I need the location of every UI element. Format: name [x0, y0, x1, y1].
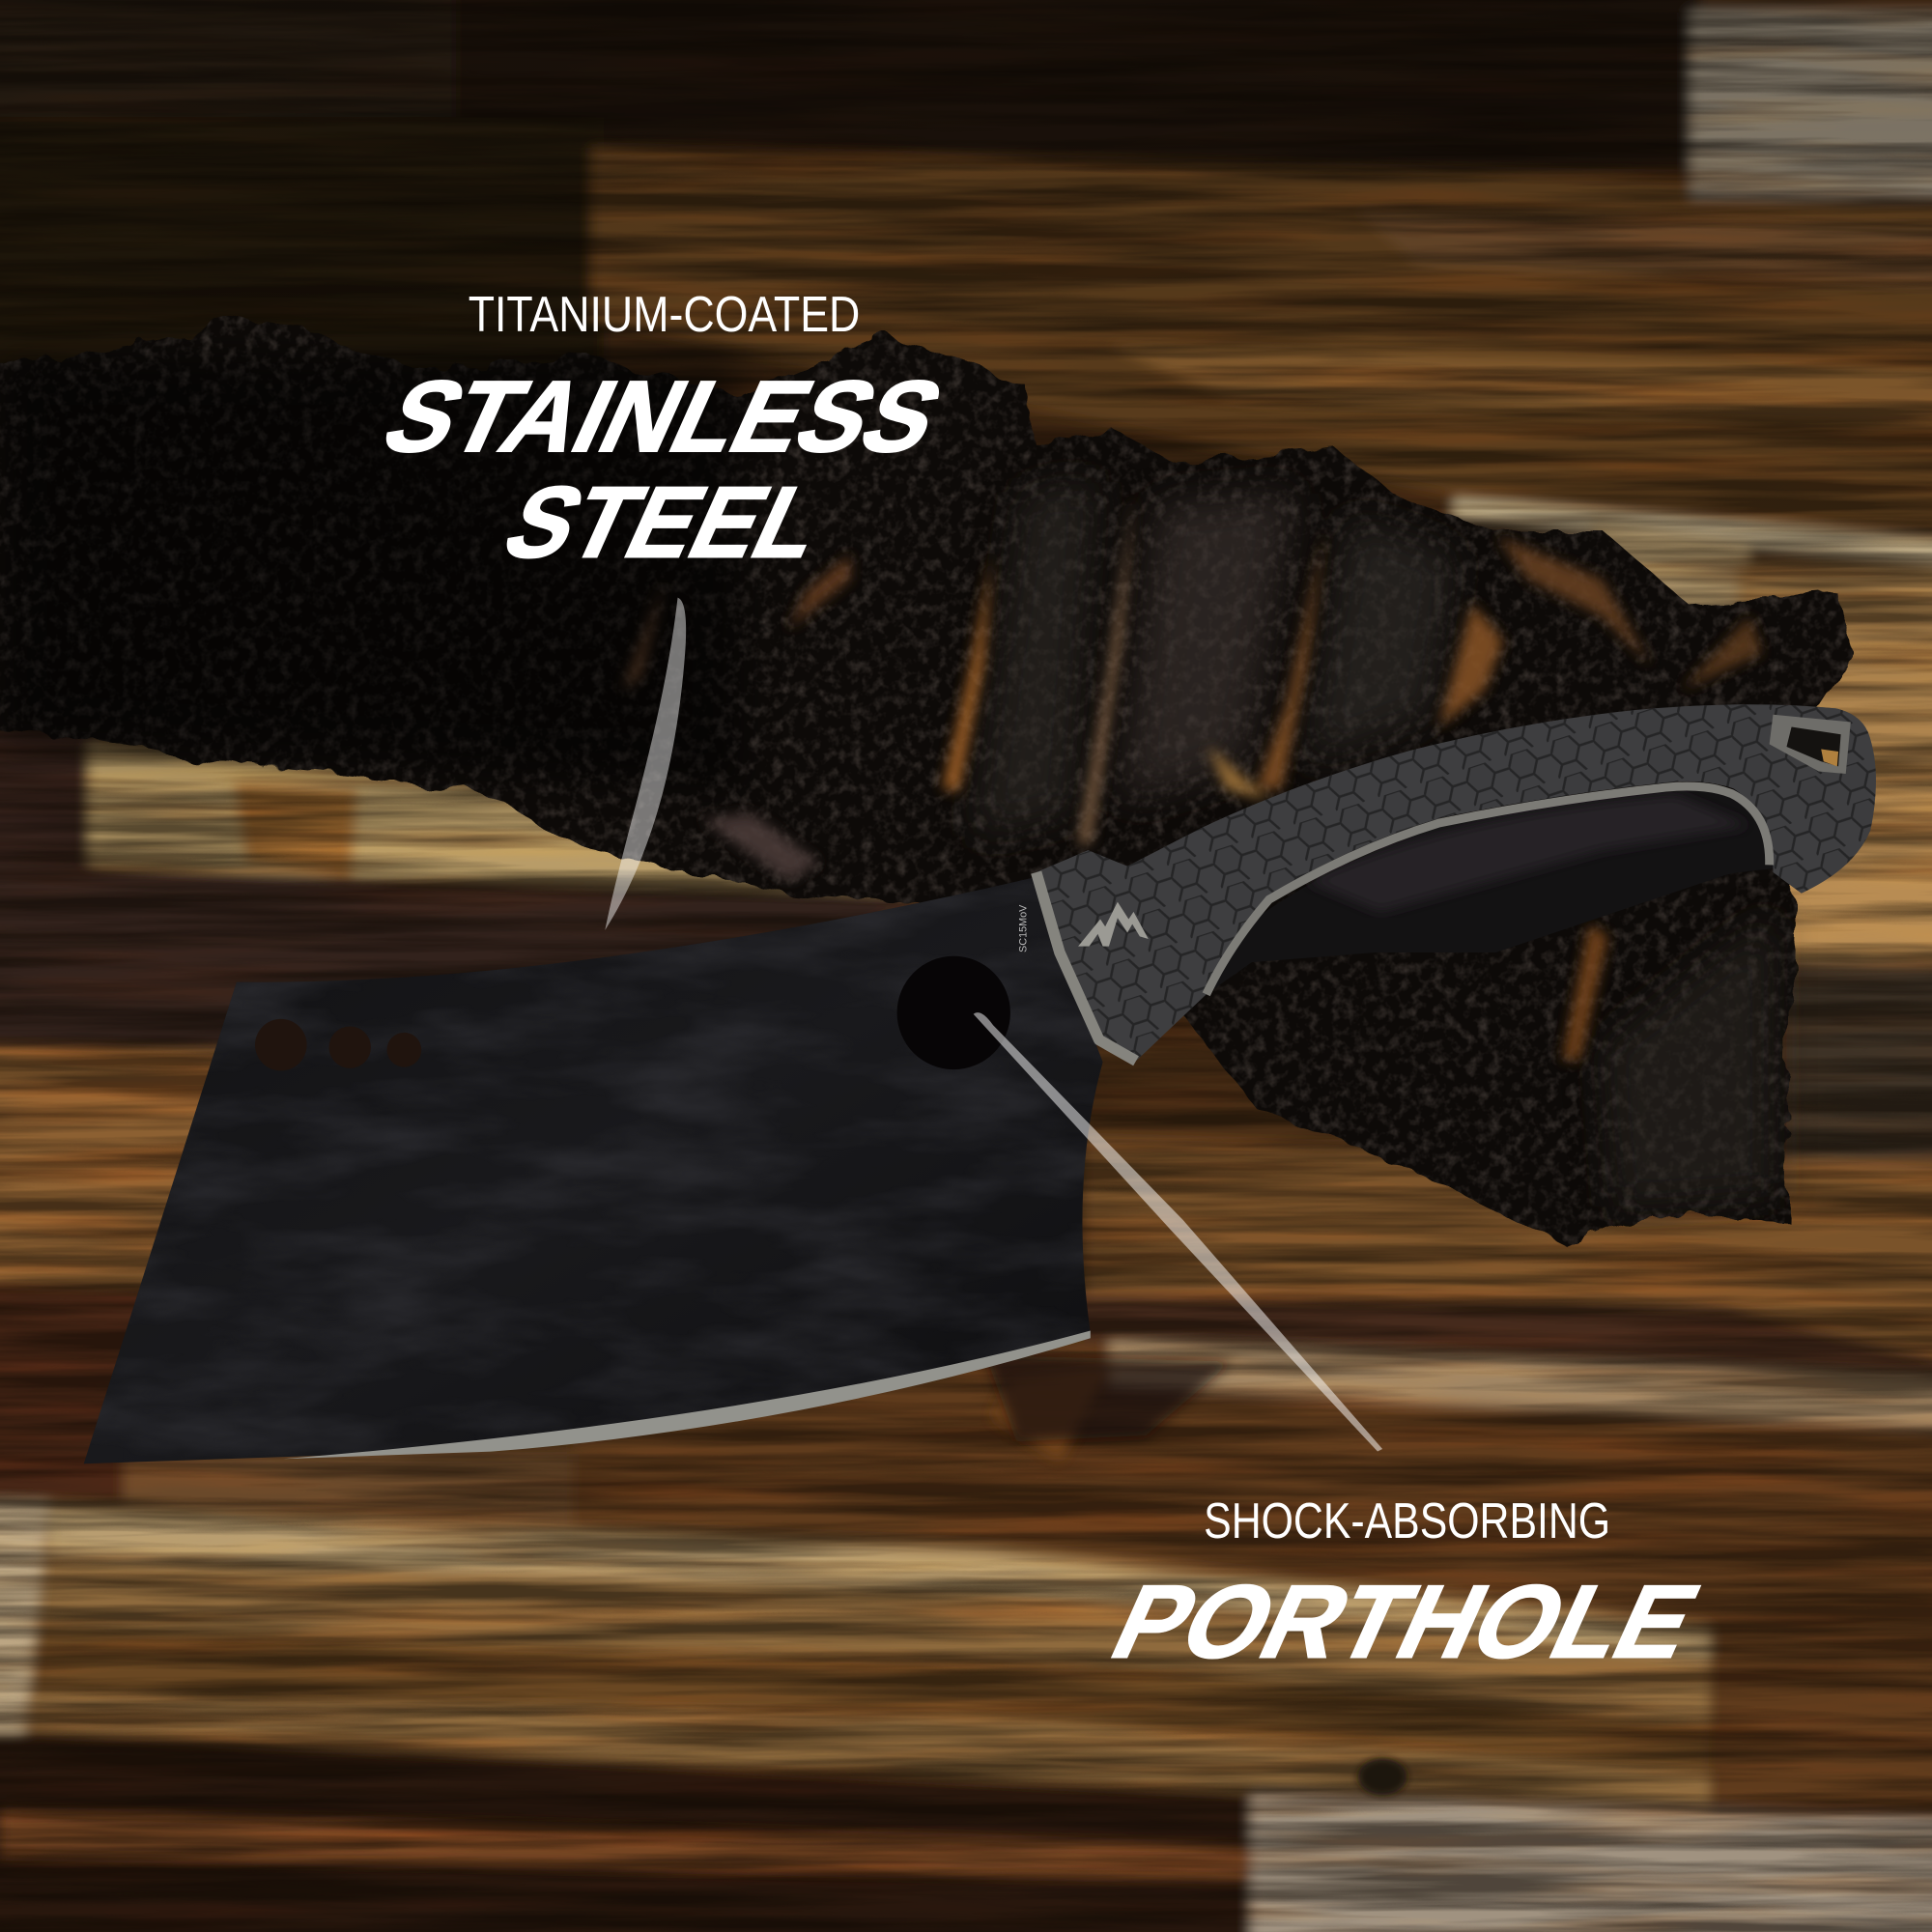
handle shell — [1037, 704, 1876, 1061]
blade hole small — [387, 1033, 421, 1067]
blade hole large — [255, 1019, 307, 1070]
heading line 2: STEEL — [488, 467, 843, 579]
subheading: TITANIUM-COATED — [469, 287, 860, 343]
shell bevel band — [1207, 786, 1770, 994]
bolster edge band — [1037, 872, 1136, 1061]
brisket slices: rendered fat seams — [622, 493, 1762, 1460]
callout line: stainless steel — [605, 598, 686, 930]
heading line 1: STAINLESS — [367, 360, 959, 473]
blade — [84, 877, 1103, 1463]
lanyard hole — [1770, 715, 1851, 774]
grip — [1207, 788, 1775, 994]
heading: PORTHOLE — [1095, 1563, 1717, 1679]
dark shade on left brisket — [0, 357, 739, 788]
brisket — [0, 314, 1855, 1460]
porthole — [897, 956, 1010, 1069]
feature label: stainless steel — [367, 287, 959, 579]
subheading: SHOCK-ABSORBING — [1204, 1493, 1610, 1549]
handle — [1035, 690, 1886, 1072]
blade hole medium — [329, 1026, 371, 1068]
cleaver — [84, 690, 1886, 1463]
wood knot — [1358, 1758, 1407, 1795]
callout line: porthole — [974, 1012, 1382, 1452]
logo: mountains — [1078, 902, 1149, 947]
feature label: porthole — [1095, 1493, 1717, 1679]
brisket slices: grey bark patches — [974, 480, 1775, 1208]
steel stamp: SC15MoV — [1018, 904, 1030, 952]
honeycomb texture — [1035, 690, 1886, 1072]
blade edge bevel — [283, 1331, 1091, 1459]
